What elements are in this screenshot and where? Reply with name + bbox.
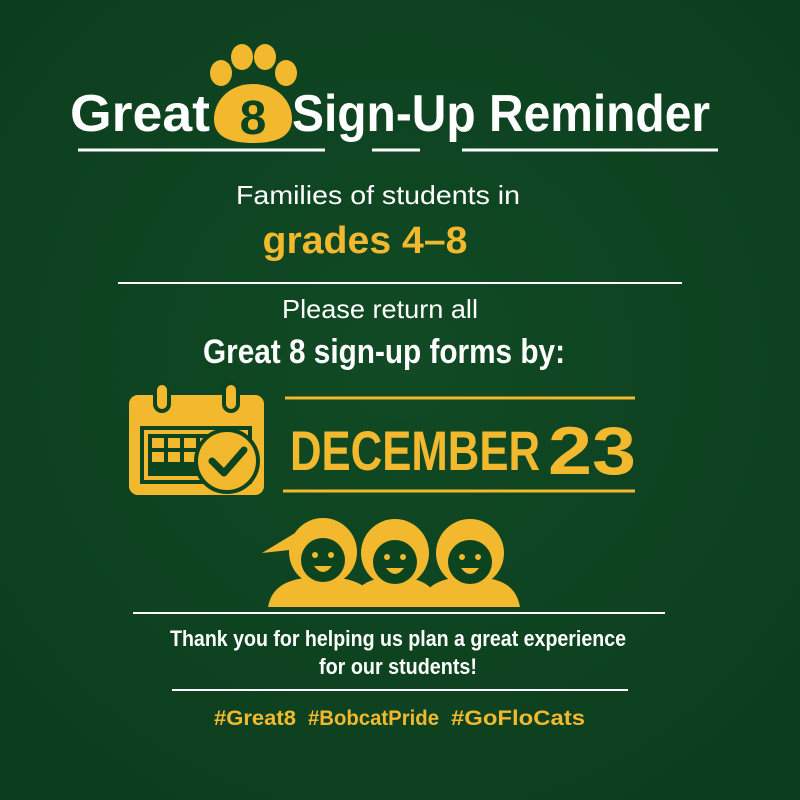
text: thank you: for our students! (319, 654, 477, 679)
icon: calendar (129, 383, 264, 495)
date banner (283, 398, 636, 491)
text: grades: grades 4–8 (262, 220, 468, 262)
icon: paw with 8: 8 (240, 92, 266, 145)
title: Sign-Up Reminder (292, 85, 710, 143)
text: forms by: Great 8 sign-up forms by: (203, 333, 565, 371)
text: families: Families of students in (236, 180, 520, 210)
text: please return: Please return all (282, 294, 478, 324)
text: thank you: Thank you for helping us plan a great experience (170, 626, 626, 651)
icon: paw with 8 (210, 44, 297, 145)
text: thank you (170, 626, 626, 679)
icon: three kids (262, 518, 520, 607)
title (70, 44, 710, 145)
text: hashtags: #BobcatPride (308, 707, 439, 730)
date banner: DECEMBER (290, 419, 540, 482)
title: Great (70, 85, 210, 143)
text: hashtags: #GoFloCats (451, 707, 585, 730)
text: hashtags: #Great8 (214, 707, 296, 730)
date banner: 23 (548, 413, 636, 489)
text: hashtags (214, 707, 585, 730)
